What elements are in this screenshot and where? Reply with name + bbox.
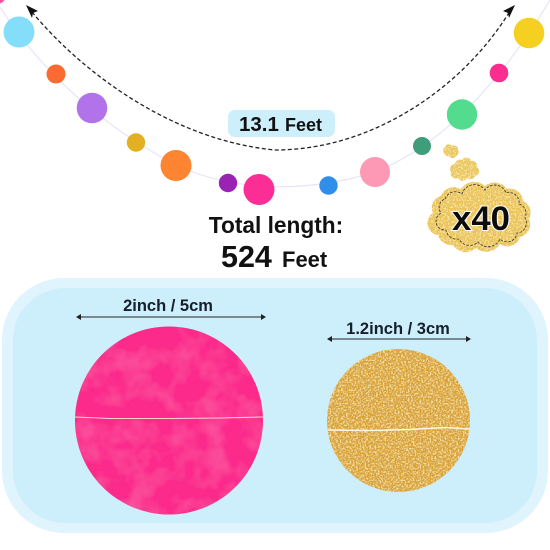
length label: 13.1 Feet: Feet — [285, 115, 322, 135]
garland circles — [0, 0, 544, 205]
dimension: 1.2inch / 3cm: 1.2inch / 3cm — [346, 320, 450, 338]
panel: size comparison — [2, 278, 548, 533]
gold cloud badge x40: x40 — [452, 200, 510, 238]
gold cloud badge x40 — [427, 182, 531, 252]
total length text — [209, 212, 343, 274]
dimension: 1.2inch / 3cm — [327, 320, 471, 342]
total length text: Total length: — [209, 212, 343, 238]
total length text: Feet — [282, 247, 328, 272]
small gold clouds — [443, 144, 479, 181]
total length text: 524 — [221, 240, 272, 274]
dashed arc arrow: single strand length — [26, 5, 515, 150]
length label: 13.1 Feet: 13.1 — [239, 113, 279, 136]
dimension: 2inch / 5cm: 2inch / 5cm — [123, 297, 213, 315]
gold circle sample — [327, 349, 470, 492]
dimension: 2inch / 5cm — [76, 297, 266, 320]
pink circle sample — [75, 326, 263, 514]
length label: 13.1 Feet — [228, 110, 335, 137]
garland string — [0, 0, 550, 187]
